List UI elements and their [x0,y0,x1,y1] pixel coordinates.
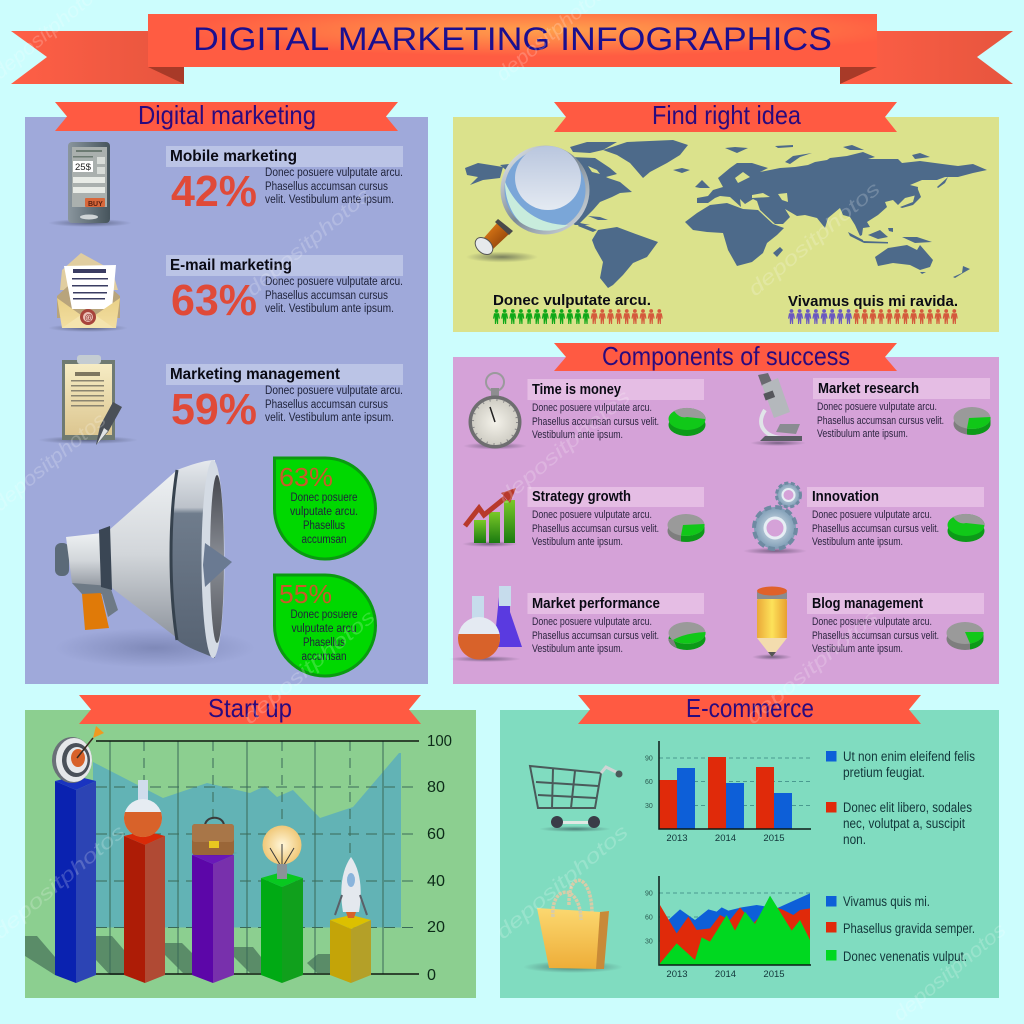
callout: 55 percent drop: Donec posuere [290,609,358,621]
row: mobile marketing: 42% [171,167,257,216]
row: innovation: Donec posuere vulputate arcu. [812,509,932,521]
row: strategy growth [528,487,705,548]
pie: time is money [668,408,706,436]
icon: pencil [752,586,792,660]
axis labels: 100 [427,733,452,750]
pie: blog management [946,622,984,650]
callout: 55 percent drop [274,575,375,676]
watermark: depositphotos [889,919,1010,1024]
heading: start up: Start up [208,693,292,723]
icon: gears [743,483,807,554]
title banner [11,14,1013,84]
row: market research [813,378,991,440]
heading: e-commerce: E-commerce [686,693,814,723]
watermark: depositphotos [492,821,633,944]
legend: area chart: Vivamus quis mi. [843,894,930,909]
icon: briefcase [190,818,238,856]
watermark: depositphotos [242,184,375,301]
row: time is money: Vestibulum ante ipsum. [532,429,623,441]
axis labels: 80 [427,779,445,796]
heading: digital marketing: Digital marketing [138,100,316,130]
row: marketing management: 59% [171,385,257,434]
icon: mobile phone: BUY [88,201,103,208]
area chart: 30 [645,938,653,946]
watermark: depositphotos [239,606,380,729]
row: e-mail marketing: Phasellus accumsan cursus [265,290,388,302]
icon: clipboard and pen [38,355,138,445]
row: mobile marketing: velit. Vestibulum ante ipsum. [265,194,394,206]
row: time is money: Donec posuere vulputate arcu. [532,402,652,414]
panel: find right idea [453,100,999,332]
pie: market research [954,407,991,435]
row: market research: Vestibulum ante ipsum. [817,428,908,440]
row: blog management: Blog management [812,595,923,612]
bar chart: 30 [645,803,653,810]
row: strategy growth: Phasellus accumsan cursus velit. [532,523,659,535]
row: strategy growth: Donec posuere vulputate arcu. [532,509,652,521]
row: mobile marketing: Mobile marketing [170,148,297,165]
legend: bar chart: Donec elit libero, sodales [843,800,972,815]
icon: envelope [48,253,128,332]
row: strategy growth: Vestibulum ante ipsum. [532,536,623,548]
callout: 63 percent drop: Phasellus [303,520,345,532]
watermark: depositphotos [744,178,885,301]
pie: strategy growth [668,514,705,542]
icon: magnifying glass [466,146,590,262]
legend: area chart: Donec venenatis vulput. [843,949,967,964]
row: blog management: Phasellus accumsan cursus velit. [812,630,939,642]
area chart: 2013 [666,969,688,980]
panel: start up [25,693,476,998]
callout: 63 percent drop: Donec posuere [290,492,358,504]
icon: mobile phone: 25$ [75,162,92,173]
callout: 55 percent drop: Phasellus [303,637,345,649]
bar chart: 2014 [715,833,736,844]
legend: area chart: Phasellus gravida semper. [843,921,975,936]
callout: 63 percent drop: accumsan [302,534,346,546]
icon: flasks [449,586,522,662]
row: market performance: Vestibulum ante ipsum. [532,643,623,655]
watermark: depositphotos [494,386,635,509]
legend: bar chart [826,749,975,847]
icon: microscope [750,373,806,446]
heading: digital marketing [55,100,398,131]
axis labels: 40 [427,873,445,890]
title banner: DIGITAL MARKETING INFOGRAPHICS [193,21,832,57]
axis labels: 60 [427,826,445,843]
row: strategy growth: Strategy growth [532,488,631,505]
bar chart: 2015 [763,833,785,844]
row: time is money [528,379,706,441]
stat: vivamus quis mi ravida [788,293,958,324]
bar: yellow [330,915,371,983]
bar shadows [25,936,330,975]
icon: light bulb [262,826,302,879]
row: innovation: Vestibulum ante ipsum. [812,536,903,548]
icon: rocket [335,857,367,918]
callout: 63 percent drop [274,458,375,559]
row: marketing management: Donec posuere vulputate arcu. [265,385,403,397]
axis labels: 20 [427,919,445,936]
pictogram row: green and red people [493,309,663,324]
bar chart: 90 [645,756,653,762]
heading: find right idea [554,100,897,132]
callout: 63 percent drop: 63% [279,462,333,492]
heading: e-commerce [578,693,921,724]
row: market research: Market research [818,380,919,397]
icon: stopwatch [463,373,527,450]
icon: shopping bag [523,880,623,973]
row: time is money: Time is money [532,381,622,398]
legend: area chart [826,894,975,964]
row: blog management: Donec posuere vulputate arcu. [812,616,932,628]
legend: bar chart: non. [843,832,866,847]
icon: envelope: @ [84,313,93,322]
callout: 63 percent drop: vulputate arcu. [290,506,358,518]
icon: mobile phone [48,142,132,227]
bar: red [124,831,165,983]
row: market performance: Donec posuere vulputate arcu. [532,616,652,628]
area chart: 60 [645,914,653,922]
row: e-mail marketing: 63% [171,276,257,325]
heading: find right idea: Find right idea [652,100,801,130]
row: innovation [807,487,984,548]
bar: green [261,872,303,983]
legend: bar chart: pretium feugiat. [843,765,925,780]
area chart [93,753,401,928]
bar chart: 2013 [666,833,688,844]
legend: bar chart: Ut non enim eleifend felis [843,749,975,764]
panel: digital marketing [25,100,428,684]
row: marketing management: velit. Vestibulum ante ipsum. [265,412,394,424]
axis labels [427,733,452,984]
axis labels: 0 [427,967,436,984]
bar chart [645,741,811,844]
row: time is money: Phasellus accumsan cursus velit. [532,416,659,428]
row: e-mail marketing: velit. Vestibulum ante ipsum. [265,303,394,315]
area chart: 2014 [715,969,736,980]
row: marketing management [166,364,403,434]
row: mobile marketing [166,146,403,216]
callout: 55 percent drop: vulputate arcu [292,623,356,635]
stat: donec vulputate arcu: Donec vulputate arcu. [493,292,651,309]
chart grid and axes [96,741,419,974]
heading: components of success: Components of success [602,341,850,371]
stat: vivamus quis mi ravida: Vivamus quis mi ravida. [788,293,958,310]
callout: 55 percent drop: 55% [279,579,332,609]
icon: round flask [124,780,162,837]
world map [465,140,987,288]
row: innovation: Phasellus accumsan cursus velit. [812,523,939,535]
row: marketing management: Marketing management [170,366,341,383]
watermark: depositphotos [742,606,883,729]
row: mobile marketing: Donec posuere vulputate arcu. [265,167,403,179]
pictogram row: purple and red people [788,309,958,324]
row: market performance: Phasellus accumsan cursus velit. [532,630,659,642]
area chart [645,876,811,980]
row: market performance: Market performance [532,595,660,612]
icon: target and dart [52,726,104,783]
row: e-mail marketing: E-mail marketing [170,257,292,274]
row: e-mail marketing [166,255,403,325]
row: e-mail marketing: Donec posuere vulputate arcu. [265,276,403,288]
bar chart: 60 [645,779,653,786]
panel: e-commerce [500,693,999,998]
callout: 55 percent drop: accumsan [302,651,346,663]
icon: megaphone [55,460,255,668]
row: innovation: Innovation [812,488,879,505]
legend: bar chart: nec, volutpat a, suscipit [843,816,965,831]
pie: market performance [668,622,706,650]
pie: innovation [948,514,984,542]
bar: blue [55,776,96,983]
icon: shopping cart [530,766,622,832]
row: market research: Phasellus accumsan cursus velit. [817,415,944,427]
row: blog management: Vestibulum ante ipsum. [812,643,903,655]
row: marketing management: Phasellus accumsan cursus [265,399,388,411]
heading: start up [79,693,421,724]
icon: growth chart [462,488,518,547]
bar: purple [192,850,234,983]
area chart: 90 [645,890,653,898]
row: market performance [528,593,706,655]
stat: donec vulputate arcu [493,292,663,324]
area chart: 2015 [763,969,785,980]
panel: components of success [449,341,999,684]
row: blog management [807,593,984,655]
row: market research: Donec posuere vulputate arcu. [817,401,937,413]
row: mobile marketing: Phasellus accumsan cursus [265,181,388,193]
